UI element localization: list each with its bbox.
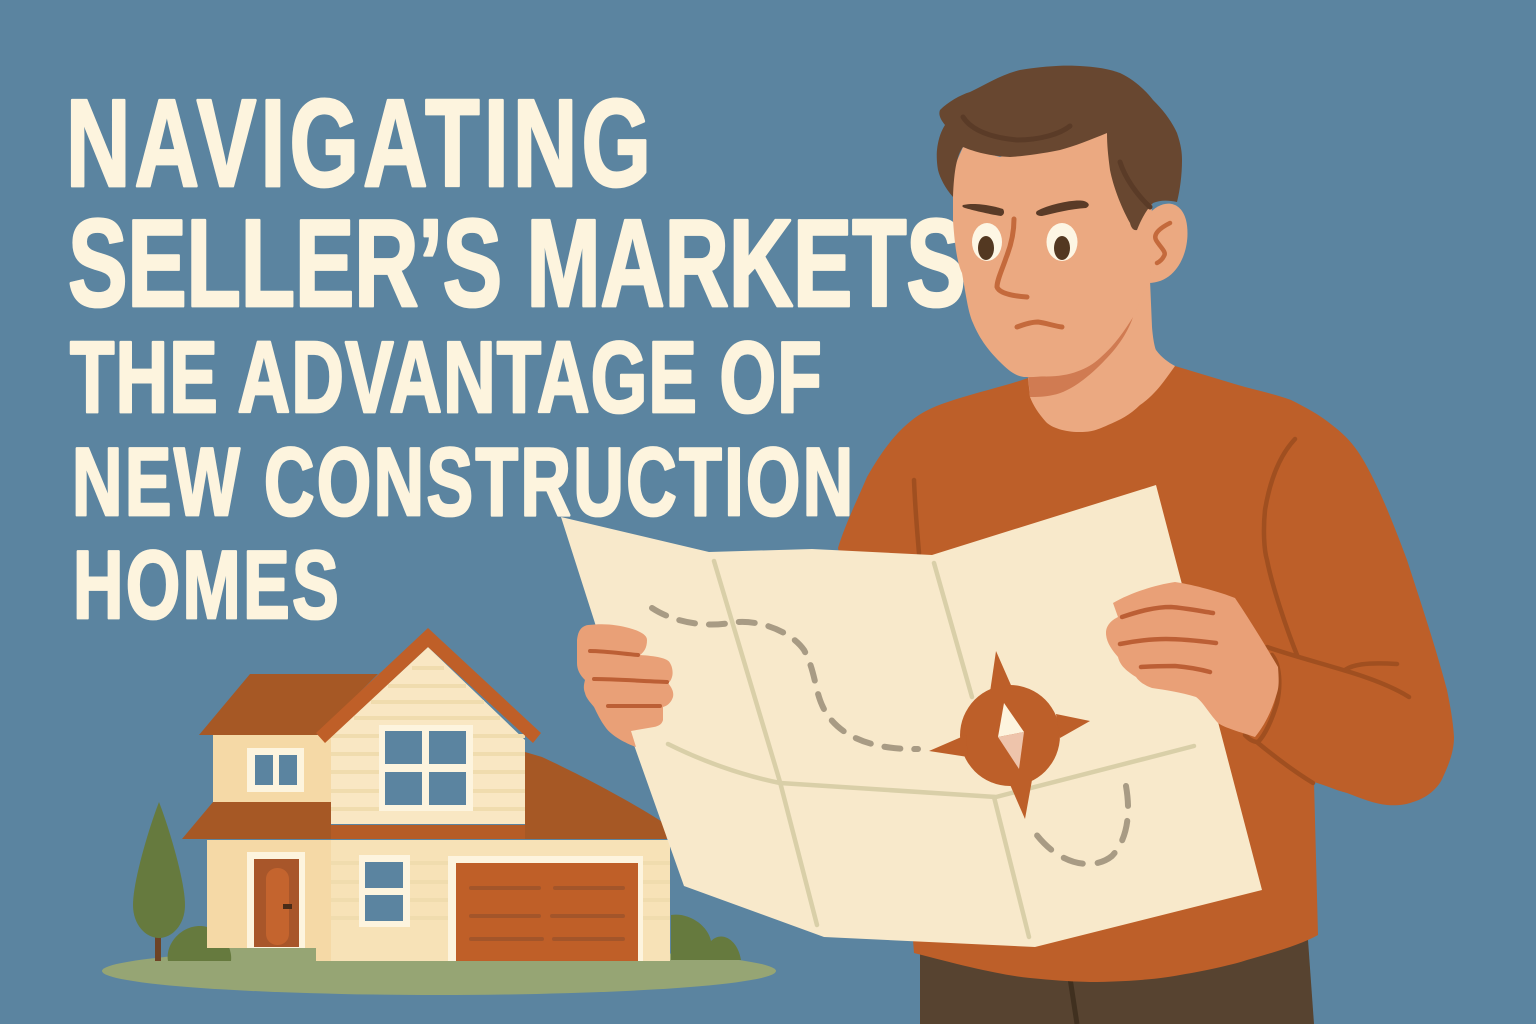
icon: tree <box>133 802 185 961</box>
title: NEW CONSTRUCTION <box>72 427 853 536</box>
sweater creases <box>914 439 1409 783</box>
title: HOMES <box>73 530 339 639</box>
right hand <box>1106 582 1279 737</box>
dashed route end <box>1033 786 1128 864</box>
upper left wall <box>213 735 331 802</box>
front door <box>247 852 305 948</box>
title: SELLER’S MARKETS <box>68 194 966 332</box>
garage door <box>448 856 643 961</box>
lower left roof <box>182 802 331 839</box>
nose <box>997 219 1027 297</box>
icon: left bush <box>168 926 231 961</box>
neck shadow <box>1028 317 1133 397</box>
hair <box>937 66 1182 230</box>
fold lines <box>668 561 1194 937</box>
title <box>66 74 966 639</box>
lower window <box>359 855 410 927</box>
house illustration <box>102 628 776 995</box>
hair strands <box>963 117 1150 207</box>
title: THE ADVANTAGE OF <box>70 320 822 434</box>
trousers <box>920 940 1314 1024</box>
mouth <box>1017 322 1062 327</box>
folded map <box>561 485 1262 947</box>
lower wall <box>207 840 670 961</box>
small upper window <box>247 748 304 792</box>
dashed route <box>652 608 918 749</box>
right lower roof <box>525 752 667 839</box>
big gable window <box>379 725 473 811</box>
neck <box>1028 280 1175 432</box>
upper left roof <box>199 674 378 735</box>
ground <box>102 947 776 995</box>
icon: compass <box>929 651 1090 819</box>
ear <box>1148 204 1187 283</box>
sweater <box>838 366 1454 982</box>
eyebrows <box>962 201 1089 216</box>
eyes <box>972 223 1078 261</box>
icon: right bush <box>671 915 741 960</box>
left hand <box>577 624 673 747</box>
title: NAVIGATING <box>66 74 651 212</box>
map sheet <box>561 485 1262 947</box>
gable fascia <box>316 628 541 743</box>
person <box>838 66 1454 1024</box>
face <box>953 133 1152 377</box>
roof band <box>331 825 525 839</box>
upper gable wall <box>331 647 525 824</box>
